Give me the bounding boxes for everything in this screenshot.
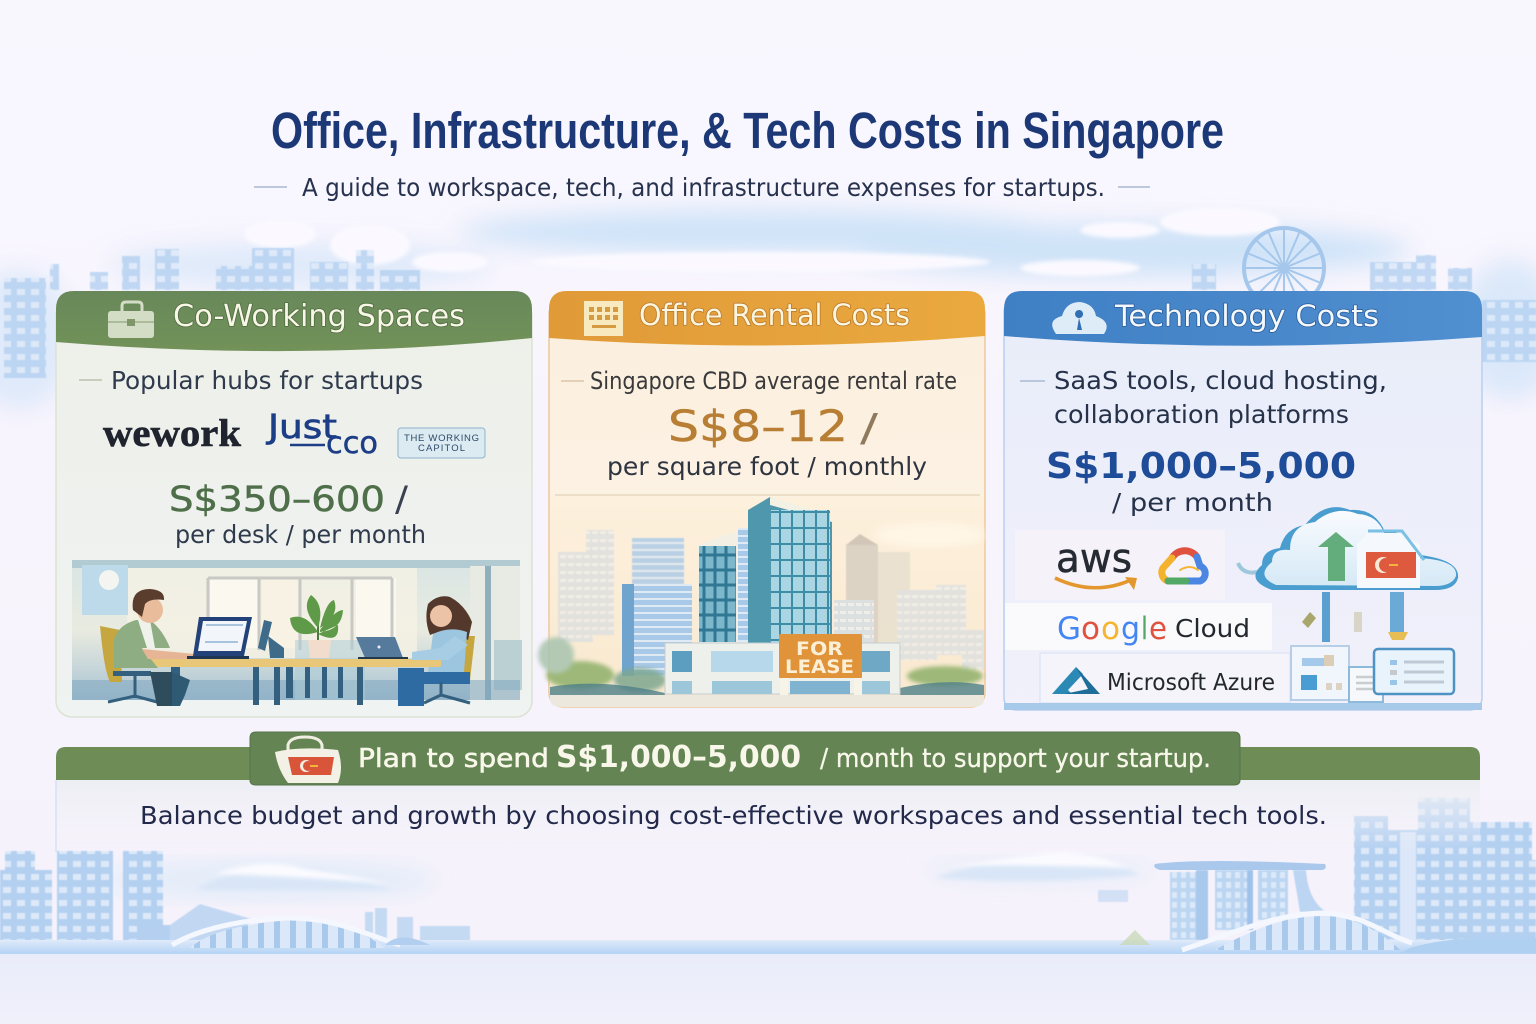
logo box: google cloud [1005, 603, 1272, 650]
logo: wework: wework [103, 412, 241, 455]
banner text: Plan to spend [358, 744, 549, 774]
sign: for lease: LEASE [785, 656, 854, 678]
laptop: woman [356, 637, 408, 659]
icon: marina bay sands roof [1154, 861, 1326, 870]
price unit: / per month [1112, 488, 1273, 517]
panel: office rental costs [538, 291, 985, 707]
sign: for lease: FOR [796, 638, 843, 660]
banner text: / month to support your startup. [820, 744, 1211, 774]
icon: briefcase [108, 302, 154, 338]
logo: the working capitol: THE WORKING [404, 433, 479, 444]
panel: co-working spaces [56, 291, 532, 717]
panel header [549, 291, 985, 346]
logo: justco [266, 407, 378, 461]
laptop: man [187, 617, 252, 659]
marina bay sands towers [1170, 870, 1326, 940]
price unit: per desk / per month [175, 520, 426, 549]
sign: for lease [779, 634, 862, 678]
price: / [860, 406, 878, 450]
monitor stand [258, 620, 284, 658]
price: S$1,000–5,000 [1046, 446, 1356, 487]
icon: bridge left [172, 918, 430, 948]
logo box: microsoft azure: Microsoft Azure [1107, 670, 1275, 696]
subtitle: A guide to workspace, tech, and infrastructure expenses for startups. [302, 173, 1105, 202]
price: S$8–12 [668, 402, 848, 452]
low building [665, 643, 900, 694]
person: man [100, 589, 195, 706]
icon: flag bag [275, 737, 341, 783]
icon: cloud [1052, 302, 1107, 334]
panel body [1004, 300, 1482, 710]
logo box: google cloud: e [1149, 611, 1167, 647]
panel: budget summary [56, 732, 1480, 852]
icon: bridge right [1120, 913, 1536, 953]
tower main [748, 497, 832, 645]
illustration: city buildings with for-lease sign [538, 497, 985, 707]
logo box: google cloud: o [1081, 611, 1100, 647]
green band [56, 747, 1480, 780]
heading: Technology Costs [1114, 299, 1379, 333]
summary text: Balance budget and growth by choosing cost-effective workspaces and essential tech tools. [140, 801, 1327, 830]
logo box: google cloud: l [1141, 611, 1148, 647]
panel body [56, 300, 532, 717]
logo: aws: aws [1056, 536, 1132, 582]
banner text: S$1,000–5,000 [556, 740, 801, 775]
panel header [1004, 291, 1482, 346]
background: lower clouds and skyline [0, 798, 1536, 954]
text: saas tools: collaboration platforms [1054, 400, 1349, 429]
logo: the working capitol: CAPITOL [418, 443, 465, 454]
panel body [549, 300, 985, 707]
logo: justco: Just [266, 407, 337, 446]
card: flag [1357, 531, 1424, 588]
text: popular hubs: Popular hubs for startups [111, 366, 423, 395]
logo box: google cloud: o [1101, 611, 1120, 647]
document cards [1291, 646, 1454, 702]
icon: office building [584, 301, 623, 336]
panel header [56, 291, 532, 351]
heading: Co-Working Spaces [173, 299, 465, 334]
sign post [780, 678, 862, 697]
logo box: google cloud: g [1121, 611, 1140, 647]
tower left [698, 523, 762, 645]
price: / [395, 480, 408, 520]
table [146, 659, 441, 706]
arrow: upload [1318, 532, 1354, 581]
panel: technology costs [1004, 291, 1482, 710]
logo: the working capitol [398, 428, 485, 458]
background: upper clouds and skyline [0, 208, 1536, 410]
icon: ferris wheel [1244, 228, 1324, 308]
text: saas tools: SaaS tools, cloud hosting, [1054, 366, 1387, 395]
logo box: microsoft azure [1040, 653, 1290, 703]
logos backdrop [1015, 530, 1225, 600]
text: rental rate: Singapore CBD average rental rate [590, 367, 957, 395]
plant [290, 595, 343, 658]
logo box: google cloud: Cloud [1175, 614, 1250, 643]
title: Office, Infrastructure, & Tech Costs in Singapore [271, 102, 1224, 159]
price unit: per square foot / monthly [607, 452, 927, 481]
price: S$350–600 [169, 480, 385, 520]
icon: google cloud [1162, 551, 1205, 581]
illustration: coworking office [72, 560, 522, 706]
banner text [358, 740, 1211, 775]
summary box [56, 780, 1480, 852]
text: saas tools [1020, 366, 1387, 429]
illustration: cloud upload [1238, 507, 1458, 702]
heading: Office Rental Costs [639, 298, 910, 332]
person: woman [398, 596, 475, 706]
logo: justco: cco [326, 426, 378, 461]
logo box: google cloud: G [1057, 611, 1081, 647]
banner [250, 732, 1240, 785]
person: woman arm [412, 636, 468, 660]
